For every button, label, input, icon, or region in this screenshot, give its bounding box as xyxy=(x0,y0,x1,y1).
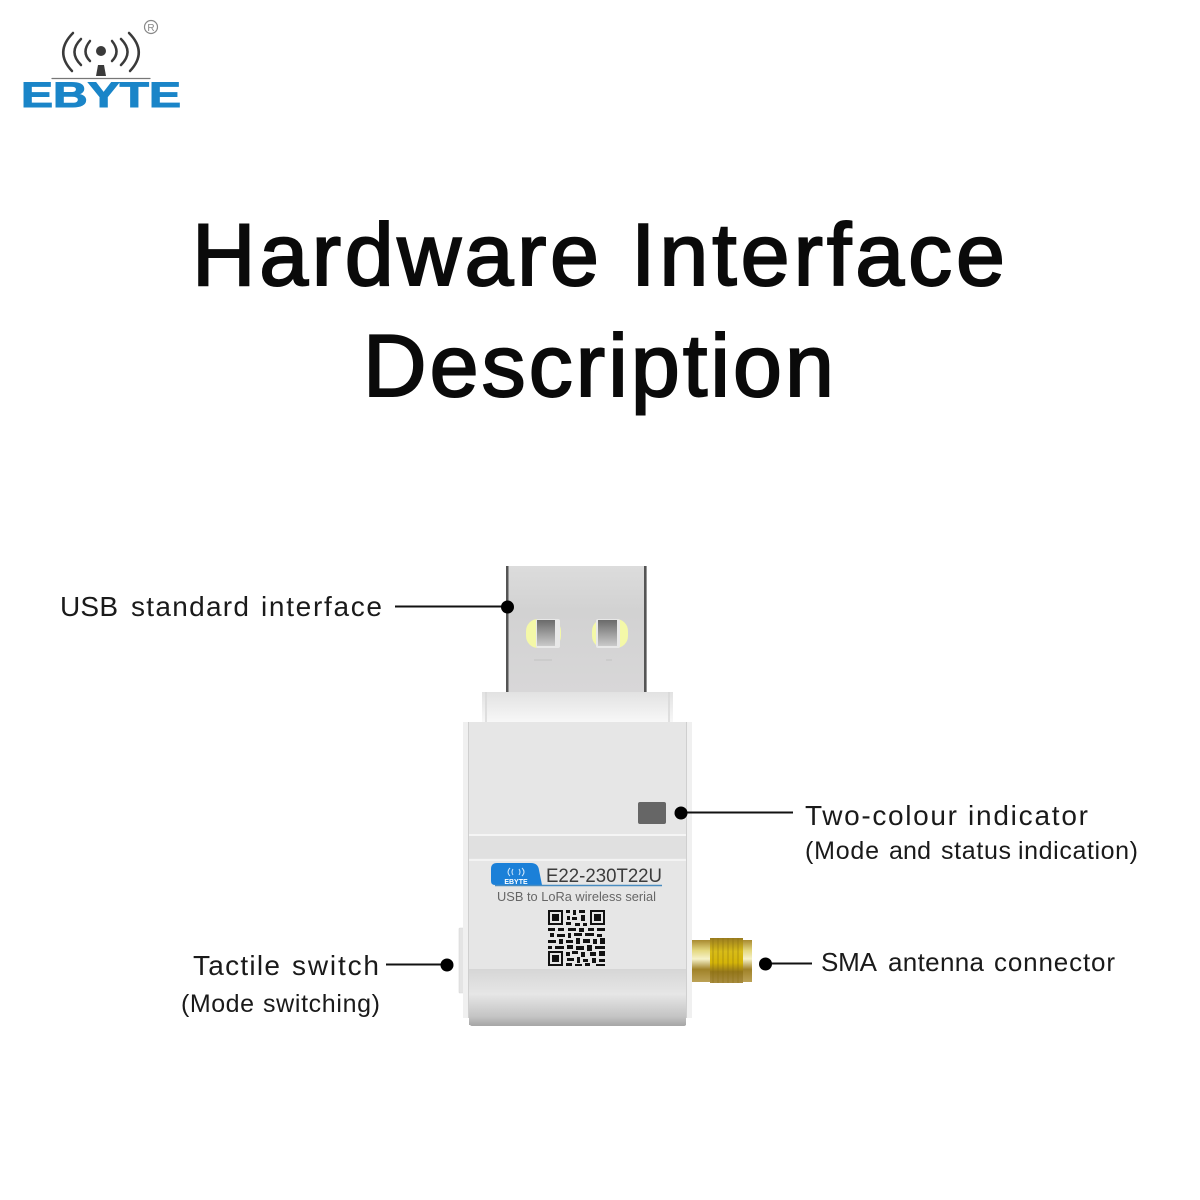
label logo text: EBYTE xyxy=(504,879,528,886)
registered mark: R xyxy=(147,23,155,34)
leader line xyxy=(395,606,507,608)
label logo icon xyxy=(508,868,524,876)
label: Tactile xyxy=(193,950,280,981)
USB plug xyxy=(506,566,647,693)
logo: EBYTE xyxy=(21,20,181,115)
wordmark: EBYTE xyxy=(21,76,181,115)
QR code xyxy=(548,910,605,966)
SMA antenna connector xyxy=(692,938,752,983)
sublabel: and xyxy=(889,837,931,865)
callout: two-colour indicator xyxy=(674,800,1138,865)
sublabel: (Mode xyxy=(805,837,879,865)
label xyxy=(193,950,379,981)
product label xyxy=(491,863,662,904)
product subtitle: USB to LoRa wireless serial xyxy=(497,889,656,904)
label: Two-colour xyxy=(805,800,957,831)
label: interface xyxy=(261,591,382,622)
label: indicator xyxy=(968,800,1088,831)
leader line xyxy=(386,964,447,966)
callout: tactile switch xyxy=(181,950,454,1018)
label: SMA xyxy=(821,947,878,977)
callout: USB standard interface xyxy=(60,591,514,622)
title word: Description: Description xyxy=(363,316,834,415)
device: USB LoRa dongle xyxy=(459,566,752,1026)
tactile switch button xyxy=(459,928,465,993)
sublabel: (Mode xyxy=(181,990,254,1018)
collar xyxy=(482,692,673,723)
sublabel xyxy=(181,990,380,1018)
leader line xyxy=(681,812,793,814)
title xyxy=(192,205,1005,415)
label xyxy=(60,591,382,622)
body xyxy=(463,722,692,1025)
label: connector xyxy=(994,947,1115,977)
sublabel: switching) xyxy=(263,990,380,1018)
sublabel: status xyxy=(941,837,1011,865)
label xyxy=(821,947,1115,977)
leader line xyxy=(766,962,812,964)
label: switch xyxy=(292,950,379,981)
sublabel xyxy=(805,837,1138,865)
model number: E22-230T22U xyxy=(546,866,662,887)
callout: SMA antenna connector xyxy=(759,947,1115,977)
title word: Hardware: Hardware xyxy=(192,205,599,304)
sublabel: indication) xyxy=(1018,837,1138,865)
icon: radio antenna xyxy=(52,20,158,78)
label: antenna xyxy=(888,947,985,977)
label xyxy=(805,800,1088,831)
label: USB xyxy=(60,591,118,622)
LED indicator window xyxy=(638,802,666,824)
label: standard xyxy=(131,591,249,622)
label logo xyxy=(491,863,542,885)
bottom edge xyxy=(470,1005,686,1026)
title word: Interface: Interface xyxy=(631,205,1005,304)
